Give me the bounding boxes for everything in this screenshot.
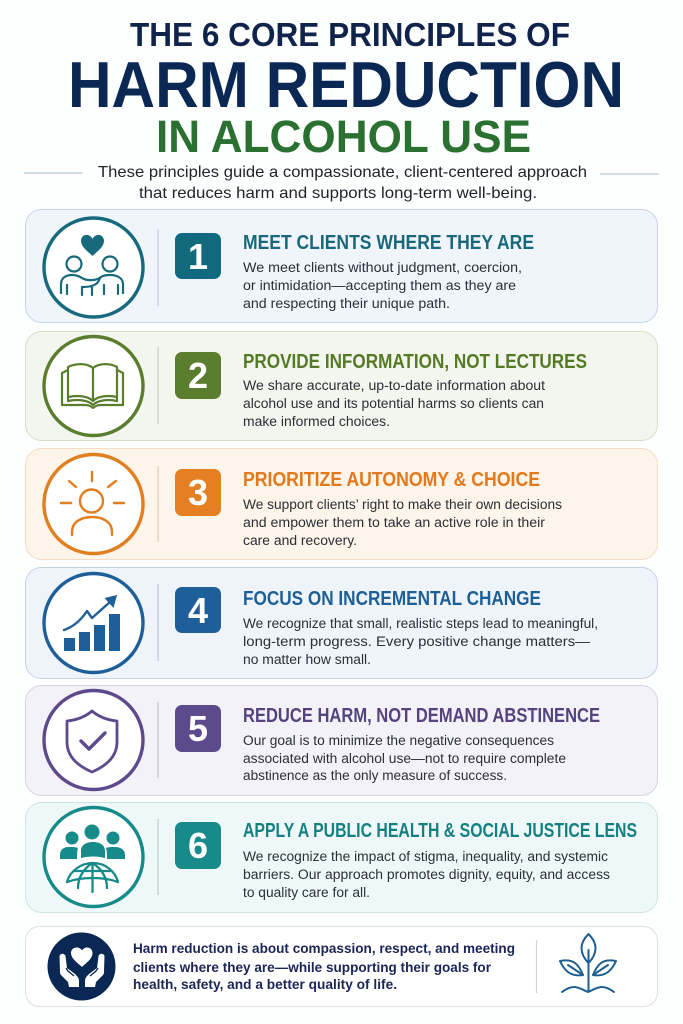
body 5: Our goal is to minimize the negative consequences xyxy=(243,733,554,748)
heading 3: PRIORITIZE AUTONOMY & CHOICE xyxy=(243,469,540,491)
closing text: health, safety, and a better quality of life. xyxy=(133,977,397,992)
body 1: or intimidation—accepting them as they are xyxy=(243,278,516,293)
number badge 5: 5 xyxy=(188,708,208,749)
body 5: abstinence as the only measure of success. xyxy=(243,768,507,783)
heading 1: MEET CLIENTS WHERE THEY ARE xyxy=(243,232,534,254)
body 6: barriers. Our approach promotes dignity, equity, and access xyxy=(243,867,610,882)
title line: harm reduction: HARM REDUCTION xyxy=(68,48,624,121)
panel: principle 6 xyxy=(26,802,658,912)
body 4: We recognize that small, realistic steps lead to meaningful, xyxy=(243,616,598,631)
heading 5: REDUCE HARM, NOT DEMAND ABSTINENCE xyxy=(243,705,600,727)
number badge 3 xyxy=(175,469,221,516)
icon: open book xyxy=(44,336,143,436)
number badge 1: 1 xyxy=(188,236,208,277)
title line: in alcohol use: IN ALCOHOL USE xyxy=(156,111,531,162)
subtitle: These principles guide a compassionate, client-centered approach xyxy=(98,164,587,181)
body 6 xyxy=(243,849,610,900)
body 4 xyxy=(243,616,598,667)
icon: person with radiating lines xyxy=(44,454,143,554)
closing text: Harm reduction is about compassion, respect, and meeting xyxy=(133,941,515,956)
body 3: and empower them to take an active role in their xyxy=(243,515,546,530)
panel: principle 3 xyxy=(26,448,658,560)
icon: people and heart xyxy=(44,218,143,317)
number badge 1 xyxy=(175,233,221,279)
body 6: We recognize the impact of stigma, inequality, and systemic xyxy=(243,849,608,864)
body 2: alcohol use and its potential harms so clients can xyxy=(243,396,544,411)
panel: principle 2 xyxy=(26,332,658,440)
subtitle: that reduces harm and supports long-term well-being. xyxy=(139,185,537,202)
icon: community and globe xyxy=(44,808,143,906)
body 2: make informed choices. xyxy=(243,414,390,429)
title line: the 6 core principles of: THE 6 CORE PRINCIPLES OF xyxy=(130,16,570,53)
panel: principle 5 xyxy=(26,686,658,796)
body 5: associated with alcohol use—not to require complete xyxy=(243,751,566,766)
body 3: We support clients’ right to make their own decisions xyxy=(243,497,562,512)
body 3: care and recovery. xyxy=(243,533,357,548)
panel: closing statement xyxy=(26,926,658,1006)
number badge 6 xyxy=(175,822,221,869)
subtitle xyxy=(98,164,587,202)
number badge 2 xyxy=(175,352,221,399)
icon: shield with check xyxy=(44,690,143,790)
panel: principle 1 xyxy=(26,210,658,322)
number badge 4: 4 xyxy=(188,590,208,631)
panel: principle 4 xyxy=(26,568,658,678)
heading 2: PROVIDE INFORMATION, NOT LECTURES xyxy=(243,351,587,373)
number badge 4 xyxy=(175,587,221,633)
number badge 3: 3 xyxy=(188,472,208,513)
closing text: clients where they are—while supporting their goals for xyxy=(133,960,492,975)
number badge 2: 2 xyxy=(188,355,208,396)
icon: sprout xyxy=(560,934,616,992)
closing text xyxy=(133,941,515,992)
body 6: to quality care for all. xyxy=(243,885,370,900)
body 5 xyxy=(243,733,566,783)
heading 4: FOCUS ON INCREMENTAL CHANGE xyxy=(243,588,541,610)
body 2: We share accurate, up-to-date information about xyxy=(243,378,545,393)
number badge 6: 6 xyxy=(188,825,208,866)
body 1: We meet clients without judgment, coercion, xyxy=(243,260,522,275)
body 3 xyxy=(243,497,562,548)
body 1: and respecting their unique path. xyxy=(243,296,450,311)
number badge 5 xyxy=(175,705,221,752)
body 4: long-term progress. Every positive change matters— xyxy=(243,634,591,649)
icon: hands holding heart xyxy=(48,932,116,1000)
body 2 xyxy=(243,378,545,429)
body 1 xyxy=(243,260,522,311)
icon: rising bar chart xyxy=(44,574,143,672)
body 4: no matter how small. xyxy=(243,652,371,667)
